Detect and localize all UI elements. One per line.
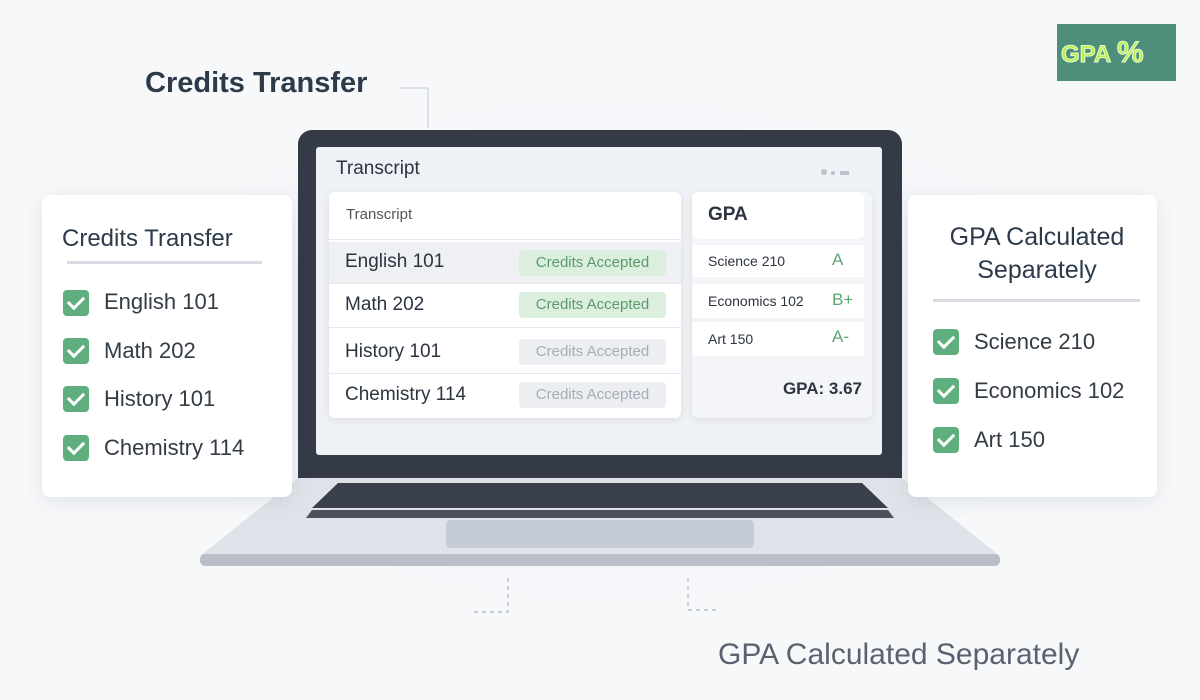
GPA panel — [692, 192, 872, 418]
transcript table: History 101 — [345, 341, 441, 362]
laptop lid — [298, 130, 902, 480]
logo: GPA %: GPA % — [1061, 36, 1144, 69]
keyboard deck — [200, 478, 1000, 566]
transcript table: Math 202 — [345, 294, 424, 315]
laptop — [200, 130, 1000, 566]
panel: GPA calculated separately: Art 150 — [974, 427, 1045, 452]
transcript table: Credits Accepted — [536, 254, 649, 271]
screen heading: Transcript — [336, 158, 420, 179]
panel: credits transfer — [42, 195, 292, 497]
bottom caption: GPA Calculated Separately — [718, 638, 1079, 671]
panel heading — [950, 223, 1124, 284]
transcript table: Credits Accepted — [536, 343, 649, 360]
screen — [316, 147, 882, 455]
transcript table: Chemistry 114 — [345, 384, 466, 405]
transcript table: Transcript — [346, 206, 412, 223]
panel heading: Separately — [977, 256, 1097, 284]
panel: credits transfer: Math 202 — [104, 338, 196, 363]
GPA panel: GPA: 3.67 — [783, 379, 862, 398]
panel: credits transfer: English 101 — [104, 289, 219, 314]
background glow — [120, 90, 1100, 610]
panel: credits transfer: Chemistry 114 — [104, 435, 244, 460]
title: Credits Transfer: Credits Transfer — [145, 67, 367, 99]
panel heading: Credits Transfer — [62, 225, 233, 252]
GPA panel: Science 210 — [708, 253, 785, 269]
transcript table: English 101 — [345, 251, 444, 272]
GPA panel: A- — [832, 327, 849, 346]
panel heading: GPA Calculated — [950, 223, 1124, 251]
transcript table: Credits Accepted — [536, 296, 649, 313]
transcript table: Credits Accepted — [536, 386, 649, 403]
panel: GPA calculated separately — [908, 195, 1157, 497]
transcript table — [329, 192, 681, 418]
GPA panel: GPA — [708, 204, 748, 225]
GPA panel: Economics 102 — [708, 293, 804, 309]
GPA panel: B+ — [832, 290, 853, 309]
GPA panel: Art 150 — [708, 331, 753, 347]
panel: GPA calculated separately: Economics 102 — [974, 378, 1124, 403]
panel: GPA calculated separately: Science 210 — [974, 329, 1095, 354]
GPA panel: A — [832, 250, 843, 269]
panel: credits transfer: History 101 — [104, 386, 215, 411]
logo: GPA % — [1057, 24, 1176, 81]
